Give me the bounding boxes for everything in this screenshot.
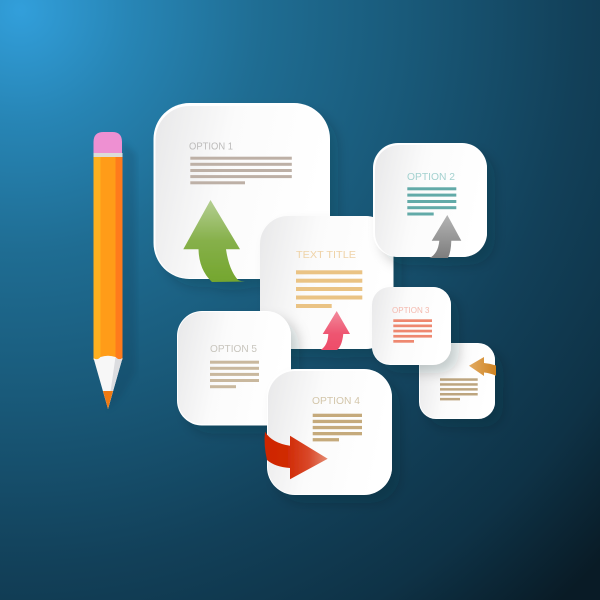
panel: option 3: [372, 287, 451, 365]
heading: option 4: OPTION 4: [312, 395, 360, 407]
pencil tip: [94, 356, 122, 409]
text lines: option 1: [190, 157, 292, 184]
heading: option 1: OPTION 1: [189, 140, 233, 152]
arrow: pink: [321, 311, 350, 350]
text lines: option 5: [210, 361, 259, 388]
text lines: option 4: [313, 414, 362, 441]
panel: option 2: [373, 143, 487, 258]
panel: option 6: [419, 343, 496, 419]
pencil ferrule: [94, 153, 122, 157]
panel: option 4: [265, 369, 392, 495]
pencil tip shading: [108, 357, 122, 409]
pencil body: [94, 157, 122, 360]
heading: option 2: OPTION 2: [407, 171, 455, 183]
pencil shadow: [108, 140, 136, 410]
panel: option 1: [154, 103, 330, 282]
heading: option 5: OPTION 5: [210, 343, 257, 355]
arrow: green: [183, 200, 245, 282]
pencil lead: [103, 391, 113, 409]
text lines: option 6: [440, 378, 478, 400]
pencil eraser: [94, 132, 122, 154]
panel: option 5: [177, 311, 291, 426]
arrow: red: [265, 432, 328, 479]
text lines: text title: [296, 270, 362, 308]
heading: text title: TEXT TITLE: [296, 249, 356, 261]
text lines: option 2: [407, 187, 456, 216]
panel: text title: [260, 216, 394, 350]
arrow: orange: [469, 357, 496, 376]
pencil: [94, 132, 136, 410]
arrow: gray: [429, 215, 461, 258]
text lines: option 3: [393, 319, 432, 343]
heading: option 3: OPTION 3: [392, 305, 430, 315]
